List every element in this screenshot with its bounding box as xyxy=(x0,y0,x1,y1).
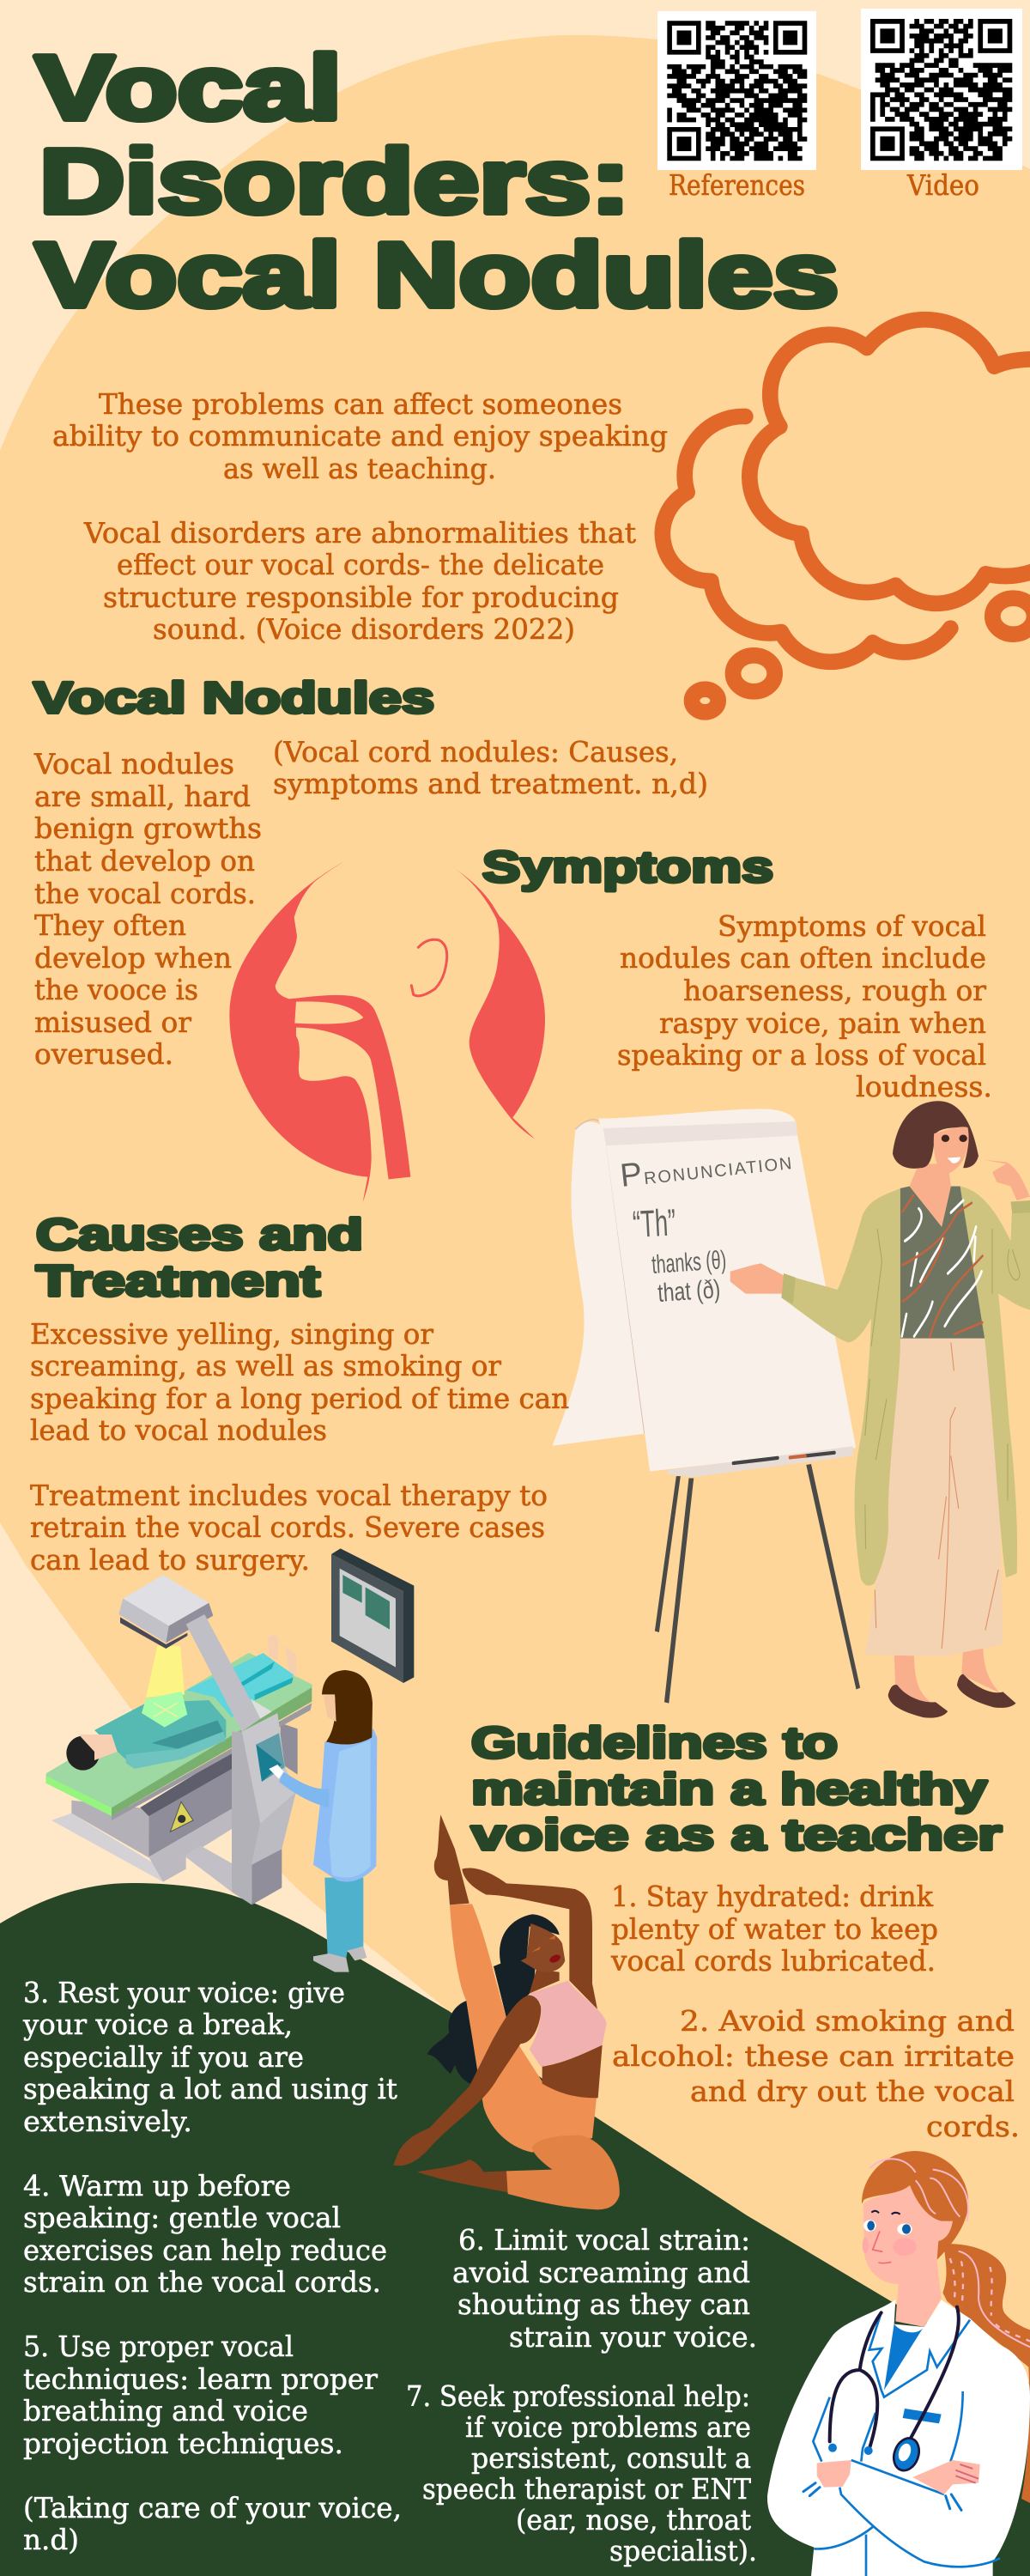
QR label: references: References xyxy=(669,168,805,202)
symptoms text: Symptoms of vocal xyxy=(718,909,986,943)
tip 4: speaking: gentle vocal xyxy=(23,2201,341,2234)
heading: guidelines xyxy=(471,1718,1002,1859)
tip 7: persistent, consult a xyxy=(471,2441,751,2475)
tip 6: avoid screaming and xyxy=(452,2256,750,2289)
heading: vocal nodules: Vocal Nodules xyxy=(33,673,434,722)
intro text: Vocal disorders are abnormalities that xyxy=(83,516,636,550)
tip 3: extensively. xyxy=(23,2105,192,2138)
illustration: medical scanner with patient and technician xyxy=(45,1548,414,1972)
citation: taking care of your voice: (Taking care of your voice, xyxy=(23,2491,402,2524)
illustration: flip chart: thanks (θ) xyxy=(651,1246,727,1279)
symptoms text xyxy=(617,909,992,1103)
tip 6: 6. Limit vocal strain: xyxy=(458,2223,750,2257)
tip 1 xyxy=(610,1880,938,1978)
vocal nodules text: develop when xyxy=(34,941,232,975)
citation: (Vocal cord nodules: Causes, xyxy=(273,735,678,769)
citation: symptoms and treatment. n,d) xyxy=(273,767,708,800)
illustration: flip chart: PRONUNCIATION xyxy=(619,1140,793,1194)
symptoms text: speaking or a loss of vocal xyxy=(617,1038,986,1072)
heading: guidelines: maintain a healthy xyxy=(471,1765,988,1814)
vocal nodules text: are small, hard xyxy=(34,780,251,813)
heading: causes and treatment: Causes and xyxy=(36,1210,363,1259)
title: Vocal Nodules xyxy=(35,225,839,326)
heading: guidelines: Guidelines to xyxy=(471,1718,838,1767)
tip 1: plenty of water to keep xyxy=(611,1912,938,1946)
tip 7: (ear, nose, throat xyxy=(516,2503,751,2537)
citation: taking care of your voice xyxy=(23,2491,402,2556)
causes and treatment text: Treatment includes vocal therapy to xyxy=(30,1479,548,1512)
tip 3: especially if you are xyxy=(23,2040,304,2074)
causes and treatment text xyxy=(30,1317,569,1577)
tip 4: exercises can help reduce xyxy=(23,2233,387,2267)
tip 5 xyxy=(23,2330,378,2460)
citation xyxy=(273,735,708,800)
intro text: as well as teaching. xyxy=(223,452,496,485)
vocal nodules text: misused or xyxy=(34,1005,191,1039)
illustration: yoga woman xyxy=(393,1814,620,2209)
intro text: These problems can affect someones xyxy=(99,387,622,421)
tip 7 xyxy=(406,2379,757,2567)
tip 3 xyxy=(22,1976,397,2138)
tip 7: speech therapist or ENT xyxy=(422,2472,751,2506)
illustration: doctor xyxy=(767,2151,1030,2576)
tip 3: your voice a break, xyxy=(22,2008,293,2041)
QR code: references xyxy=(657,11,816,170)
intro text xyxy=(52,387,668,646)
tip 6 xyxy=(452,2223,757,2354)
vocal nodules text xyxy=(33,747,262,1071)
citation: taking care of your voice: n.d) xyxy=(23,2523,79,2556)
causes and treatment text: speaking for a long period of time can xyxy=(30,1382,569,1415)
tip 5: breathing and voice xyxy=(23,2394,308,2427)
heading: causes and treatment xyxy=(36,1210,363,1305)
tip 7: 7. Seek professional help: xyxy=(406,2379,750,2413)
title: Disorders: xyxy=(39,131,630,232)
heading: causes and treatment: Treatment xyxy=(36,1256,320,1305)
causes and treatment text: Excessive yelling, singing or xyxy=(30,1317,433,1351)
illustration: teacher xyxy=(730,1101,1030,1718)
illustration: flip chart: that (ð) xyxy=(657,1275,721,1308)
QR label: video: Video xyxy=(906,168,979,202)
icon: thought bubble xyxy=(663,319,1030,712)
title: Vocal xyxy=(35,38,342,139)
tip 4: 4. Warm up before xyxy=(23,2169,291,2202)
vocal nodules text: benign growths xyxy=(34,811,262,845)
vocal nodules text: They often xyxy=(34,908,186,942)
intro text: ability to communicate and enjoy speaking xyxy=(52,419,668,453)
tip 6: shouting as they can xyxy=(457,2287,750,2321)
vocal nodules text: Vocal nodules xyxy=(33,747,234,781)
tip 2 xyxy=(612,2004,1020,2143)
tip 7: specialist). xyxy=(609,2534,757,2567)
causes and treatment text: screaming, as well as smoking or xyxy=(30,1349,501,1382)
vocal nodules text: the vocal cords. xyxy=(34,877,256,910)
symptoms text: nodules can often include xyxy=(620,941,986,975)
intro text: sound. (Voice disorders 2022) xyxy=(153,612,575,646)
illustration: flip chart xyxy=(553,1109,860,1704)
tip 2: cords. xyxy=(926,2110,1020,2143)
intro text: effect our vocal cords- the delicate xyxy=(117,548,604,581)
tip 1: vocal cords lubricated. xyxy=(610,1944,936,1978)
tip 4: strain on the vocal cords. xyxy=(23,2265,381,2299)
tip 5: techniques: learn proper xyxy=(23,2362,378,2396)
tip 5: projection techniques. xyxy=(23,2427,343,2460)
vocal nodules text: the vooce is xyxy=(34,973,198,1006)
tip 2: alcohol: these can irritate xyxy=(612,2039,1015,2073)
vocal nodules text: that develop on xyxy=(34,844,255,878)
tip 1: 1. Stay hydrated: drink xyxy=(611,1880,934,1913)
symptoms text: raspy voice, pain when xyxy=(659,1006,986,1040)
tip 3: speaking a lot and using it xyxy=(23,2072,397,2105)
illustration: flip chart: “Th” xyxy=(632,1201,676,1246)
causes and treatment text: lead to vocal nodules xyxy=(30,1413,327,1447)
causes and treatment text: can lead to surgery. xyxy=(30,1543,310,1577)
intro text: structure responsible for producing xyxy=(103,580,619,614)
background dark green hill xyxy=(0,1883,1030,2576)
icon: head and throat profile xyxy=(229,859,545,1202)
tip 4 xyxy=(23,2169,387,2299)
heading: guidelines: voice as a teacher xyxy=(471,1810,1002,1859)
causes and treatment text: retrain the vocal cords. Severe cases xyxy=(30,1510,545,1544)
tip 6: strain your voice. xyxy=(509,2320,757,2354)
symptoms text: hoarseness, rough or xyxy=(683,974,986,1007)
tip 2: 2. Avoid smoking and xyxy=(680,2004,1015,2038)
symptoms text: loudness. xyxy=(856,1070,992,1103)
tip 2: and dry out the vocal xyxy=(690,2075,1015,2108)
QR code: video xyxy=(861,9,1022,170)
vocal nodules text: overused. xyxy=(34,1037,173,1071)
tip 7: if voice problems are xyxy=(465,2410,751,2444)
tip 3: 3. Rest your voice: give xyxy=(23,1976,345,2009)
heading: symptoms: Symptoms xyxy=(482,842,773,891)
tip 5: 5. Use proper vocal xyxy=(23,2330,294,2363)
title xyxy=(35,38,839,326)
